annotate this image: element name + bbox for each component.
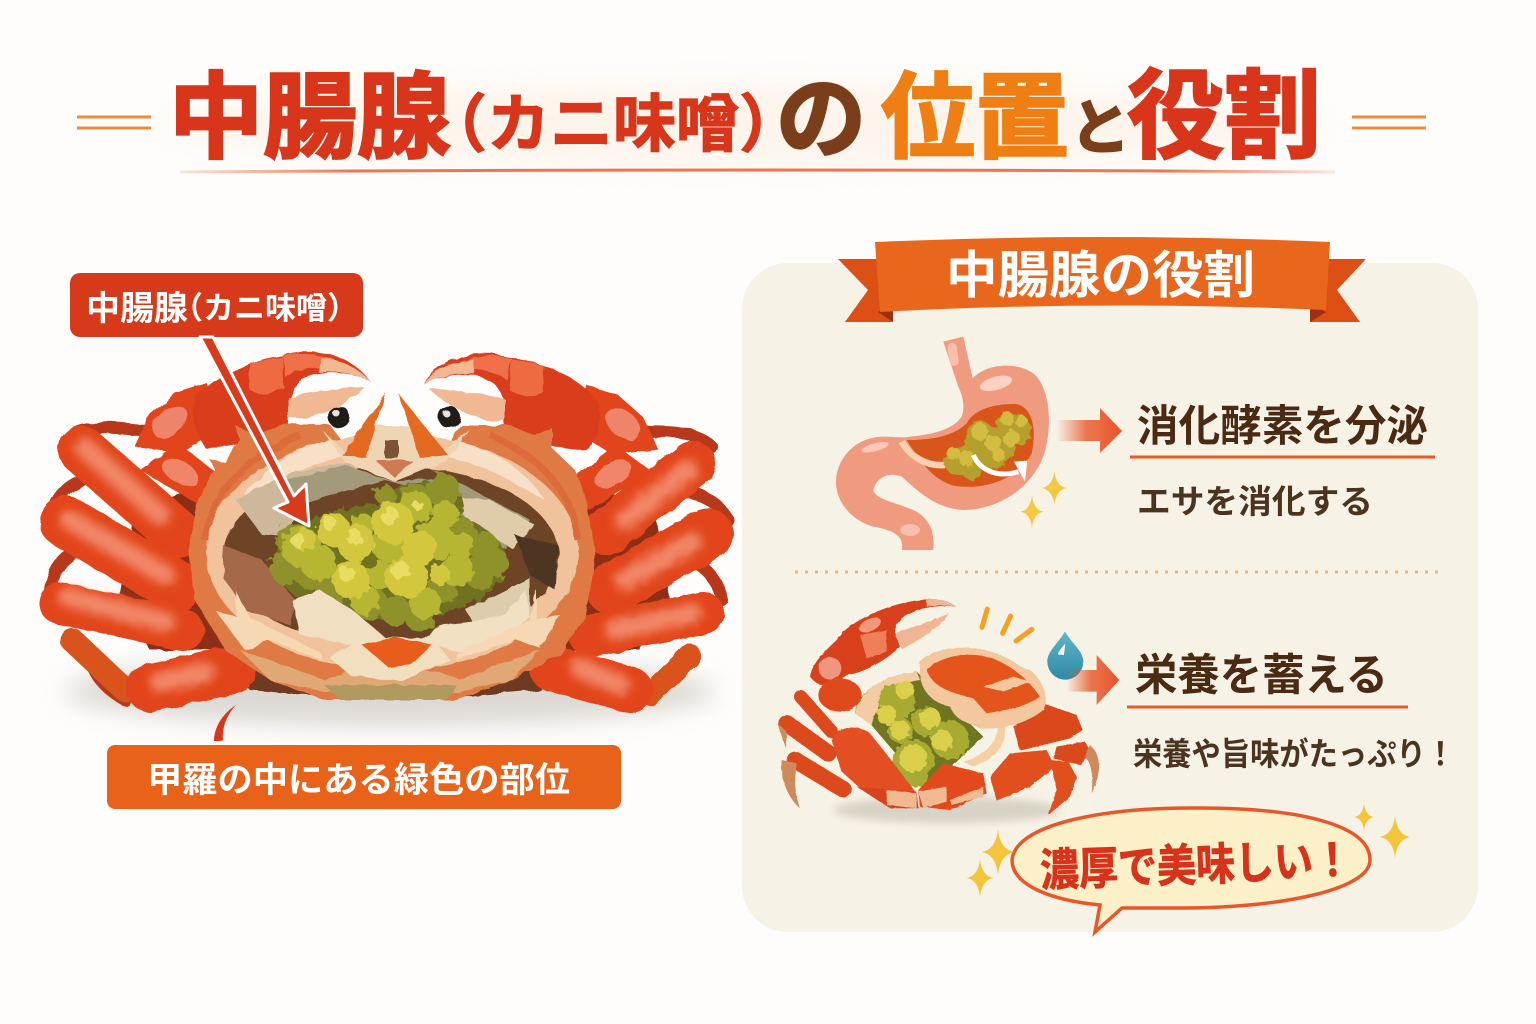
- red accent mark: [214, 705, 236, 741]
- title: と: [1070, 95, 1130, 162]
- central notch: [322, 426, 470, 482]
- text: store nutrients: [1127, 651, 1455, 772]
- divider: [795, 570, 1440, 574]
- banner: [838, 237, 1366, 322]
- title: 中腸腺: [169, 65, 451, 170]
- text: secrete digestive enzymes: エサを消化する: [1137, 483, 1373, 520]
- icon: stomach: [836, 337, 1067, 550]
- title: 役割: [1127, 62, 1321, 171]
- shell inner plates: [236, 463, 370, 537]
- title: の: [776, 70, 866, 170]
- callout: midgut gland label: 中腸腺: [86, 290, 188, 328]
- speech bubble: rich and tasty: 濃厚で美味しい！: [1039, 834, 1353, 896]
- sparkles: [966, 804, 1410, 897]
- text: secrete digestive enzymes: 消化酵素を分泌: [1137, 403, 1428, 451]
- antennae: [342, 393, 448, 458]
- callout: midgut gland label: （カニ味噌）: [172, 291, 358, 326]
- illustration: opened crab with midgut gland: [50, 352, 728, 726]
- arrow: stomach to enzyme: [1057, 408, 1122, 453]
- caption bar: 甲羅の中にある緑色の部位: [147, 761, 570, 800]
- arrow: points to midgut gland: [200, 337, 309, 526]
- caption bar: [107, 745, 621, 809]
- callout: midgut gland label: [70, 273, 363, 337]
- title: 位置: [881, 65, 1069, 170]
- icon: crab storing nutrients: [777, 599, 1119, 823]
- speech bubble: rich and tasty: [1012, 808, 1370, 932]
- banner: 中腸腺の役割: [946, 247, 1255, 304]
- text: secrete digestive enzymes: [1130, 403, 1435, 520]
- text: store nutrients: 栄養や旨味がたっぷり！: [1133, 736, 1455, 772]
- text: store nutrients: 栄養を蓄える: [1135, 651, 1388, 700]
- roe: midgut gland: [269, 473, 509, 632]
- eyes: [328, 406, 350, 428]
- panel: roles of the midgut gland: [742, 237, 1478, 932]
- title ornaments: [77, 117, 1426, 172]
- crab carapace: [188, 393, 596, 700]
- title: [165, 62, 1325, 171]
- crab shadow: [65, 658, 715, 726]
- crab legs and claws: [50, 352, 728, 700]
- lower shell and orange roe: [215, 590, 560, 700]
- title: （カニ味噌）: [424, 90, 802, 160]
- dark joints behind legs: [120, 480, 225, 650]
